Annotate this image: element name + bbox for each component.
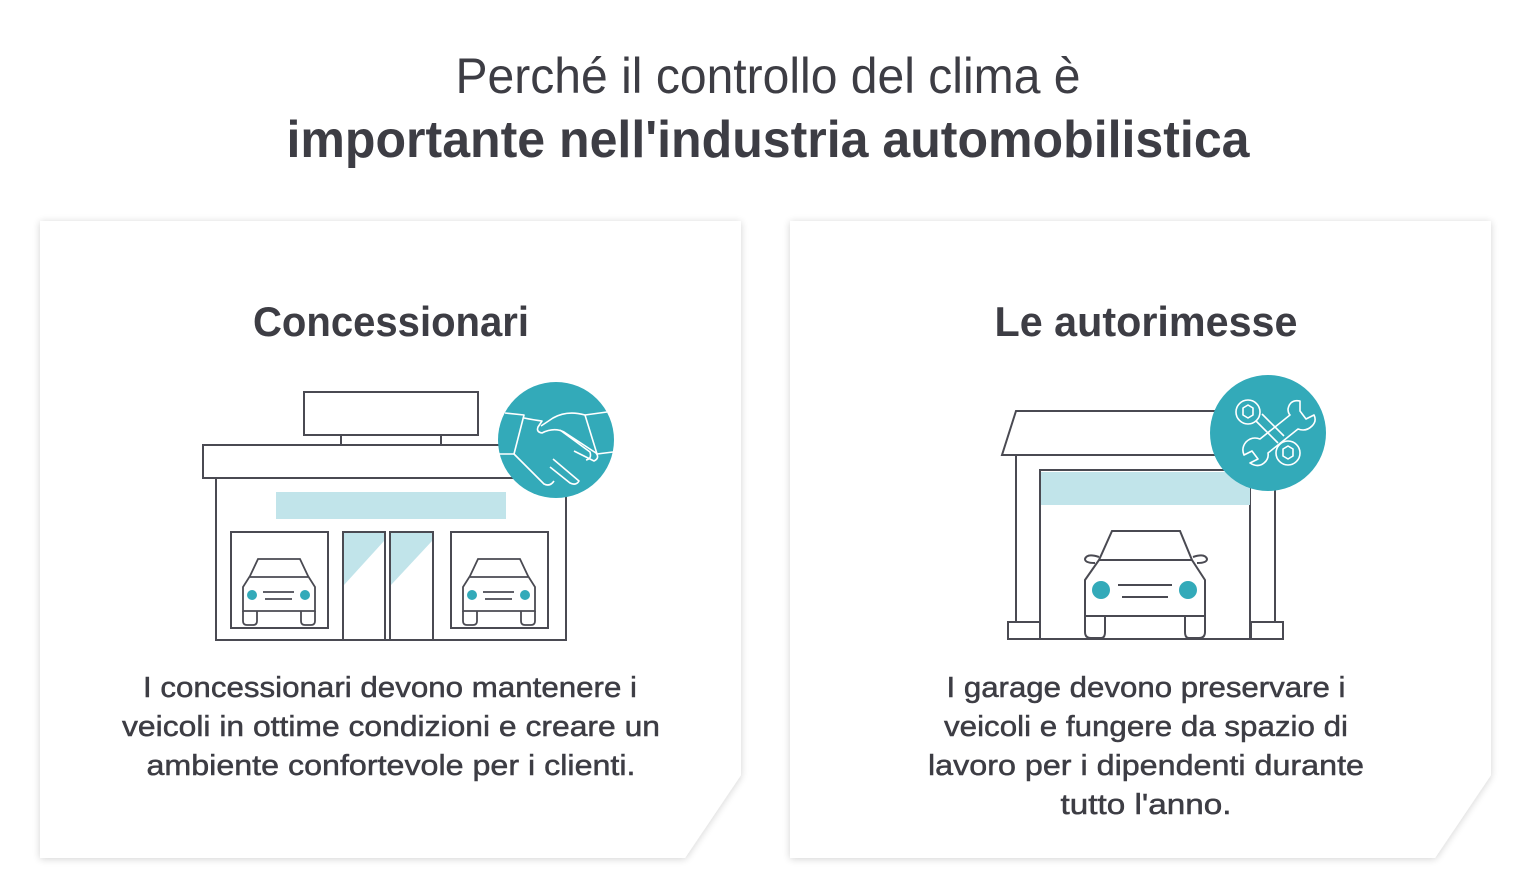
- text: left description: I concessionari devono mantenere i: [143, 672, 637, 704]
- text: right description: tutto l'anno.: [1060, 789, 1232, 821]
- car right: [463, 559, 535, 625]
- text: right description: lavoro per i dipendenti durante: [928, 750, 1364, 782]
- title: importante nell'industria automobilistica: [286, 111, 1251, 169]
- icon: wrenches circle: [1210, 375, 1326, 491]
- title: Perché il controllo del clima è: [456, 48, 1080, 104]
- car left: [243, 559, 315, 625]
- text: right description: [928, 672, 1364, 821]
- text: right description: veicoli e fungere da spazio di: [944, 711, 1348, 743]
- text: left description: [122, 672, 660, 782]
- title: [286, 48, 1251, 169]
- text: right description: I garage devono preservare i: [946, 672, 1346, 704]
- text: left description: veicoli in ottime condizioni e creare un: [122, 711, 660, 743]
- icon: dealership building: [202, 382, 614, 641]
- icon: garage: [1000, 375, 1326, 640]
- heading: Le autorimesse: Le autorimesse: [994, 298, 1298, 345]
- icon: handshake circle: [498, 382, 614, 498]
- text: left description: ambiente confortevole per i clienti.: [146, 750, 636, 782]
- heading: Concessionari: Concessionari: [253, 298, 529, 345]
